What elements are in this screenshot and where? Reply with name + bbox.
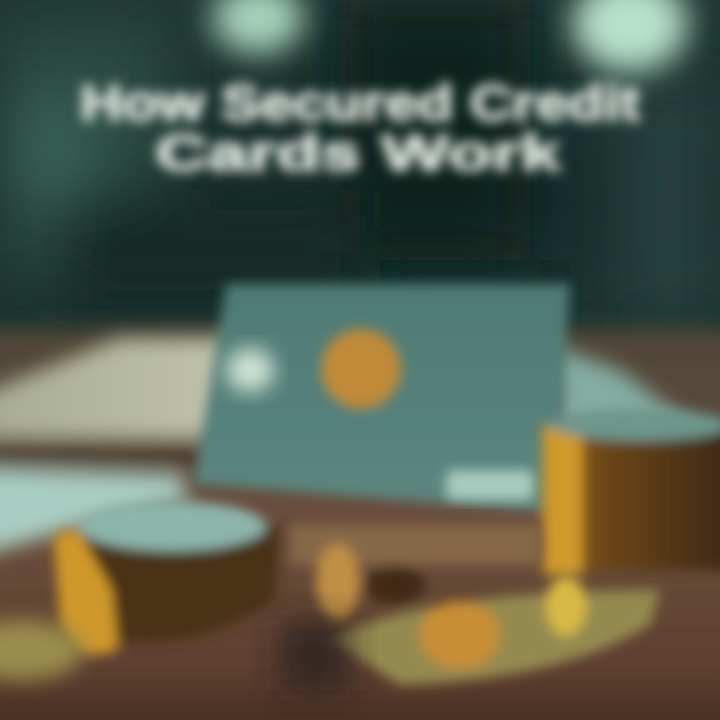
background lights [212, 0, 688, 72]
card chip [321, 329, 401, 409]
credit card [194, 284, 570, 512]
bottom shadow [280, 620, 350, 690]
title: Cards Work [156, 125, 561, 181]
right gold cup [542, 409, 720, 575]
card brand mark [446, 470, 534, 500]
card logo highlight [226, 348, 274, 392]
title [80, 75, 640, 181]
bottom center coins and bowl [290, 525, 660, 685]
paper sheet on table [0, 338, 700, 555]
background: dark forest [0, 0, 720, 340]
title: How Secured Credit [80, 75, 640, 131]
table surface [0, 328, 720, 720]
bottom-left bowl [0, 620, 84, 680]
left gold cup [54, 501, 280, 655]
